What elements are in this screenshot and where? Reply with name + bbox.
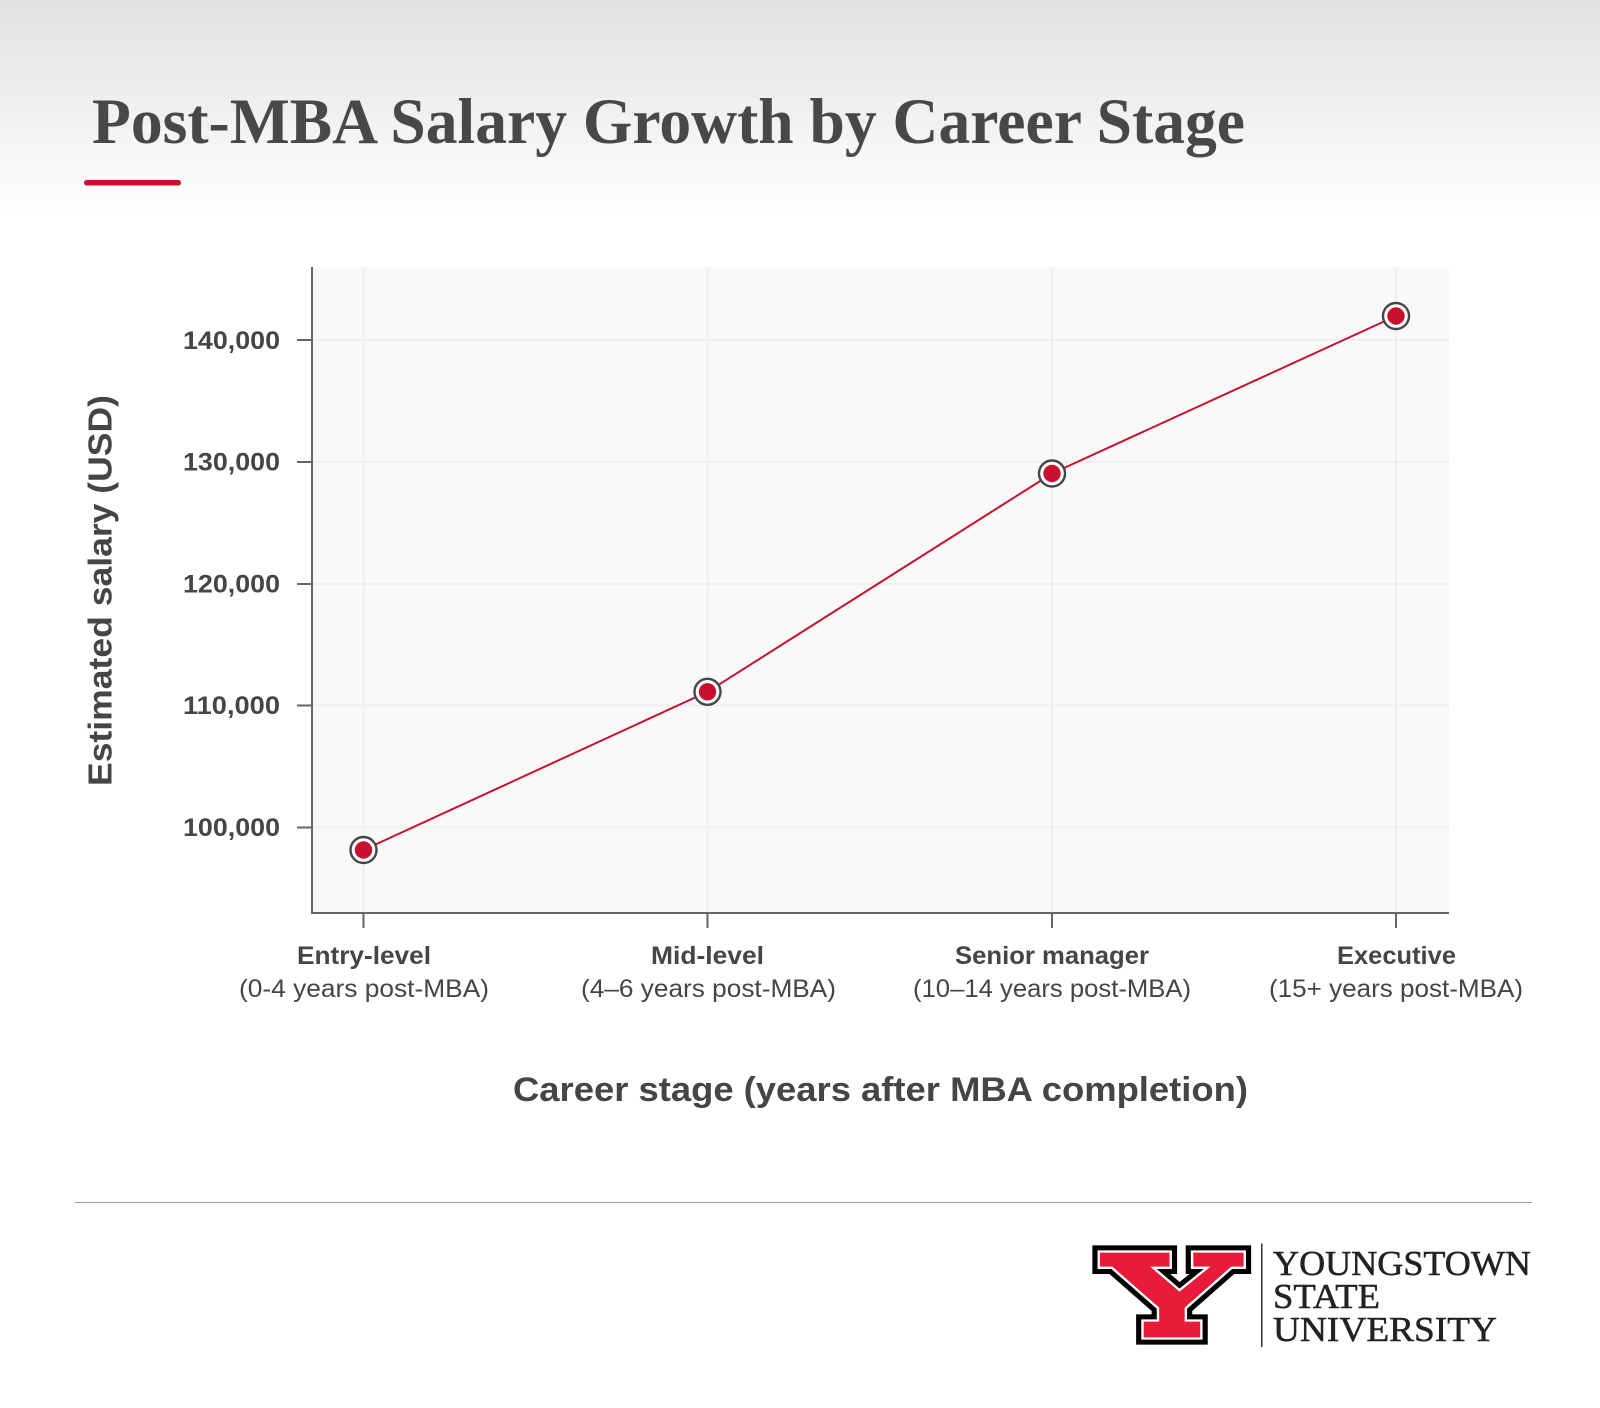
category label: senior manager: (10–14 years post-MBA) <box>913 975 1191 1003</box>
logo divider <box>1261 1244 1262 1347</box>
y-axis tick labels <box>183 327 280 842</box>
y-axis tick labels: 100,000 <box>183 814 280 842</box>
y-axis tick labels: 120,000 <box>183 570 280 598</box>
university wordmark <box>1273 1244 1531 1349</box>
title accent rule <box>84 180 181 186</box>
header gradient band <box>0 0 1600 215</box>
category label: executive: (15+ years post-MBA) <box>1269 975 1523 1003</box>
university logo <box>1100 1244 1531 1349</box>
category label: mid-level: Mid-level <box>651 942 764 970</box>
data point: senior manager <box>1039 460 1065 486</box>
category label: entry-level <box>239 942 489 1003</box>
line chart <box>82 267 1523 1109</box>
category label: executive: Executive <box>1337 942 1456 970</box>
category label: entry-level: (0-4 years post-MBA) <box>239 975 489 1003</box>
y-axis title: Estimated salary (USD) <box>82 395 118 786</box>
salary trend line <box>364 316 1396 850</box>
university wordmark: YOUNGSTOWN <box>1273 1244 1531 1283</box>
y-axis tick labels: 110,000 <box>183 692 280 720</box>
category label: executive <box>1269 942 1523 1003</box>
title: Post-MBA Salary Growth by Career Stage <box>92 86 1245 158</box>
category label: entry-level: Entry-level <box>297 942 431 970</box>
data point: entry-level <box>350 837 376 863</box>
y-axis tick labels: 140,000 <box>183 327 280 355</box>
data point: executive <box>1383 303 1409 329</box>
y-axis tick labels: 130,000 <box>183 448 280 476</box>
icon: block Y <box>1100 1253 1244 1337</box>
plot background <box>312 267 1449 913</box>
university wordmark: UNIVERSITY <box>1273 1310 1497 1349</box>
university wordmark: STATE <box>1273 1277 1380 1316</box>
footer divider <box>75 1202 1532 1203</box>
category label: mid-level <box>581 942 836 1003</box>
x-axis title: Career stage (years after MBA completion) <box>513 1071 1248 1109</box>
category label: mid-level: (4–6 years post-MBA) <box>581 975 836 1003</box>
data point: mid-level <box>694 679 720 705</box>
category label: senior manager <box>913 942 1191 1003</box>
category label: senior manager: Senior manager <box>955 942 1149 970</box>
